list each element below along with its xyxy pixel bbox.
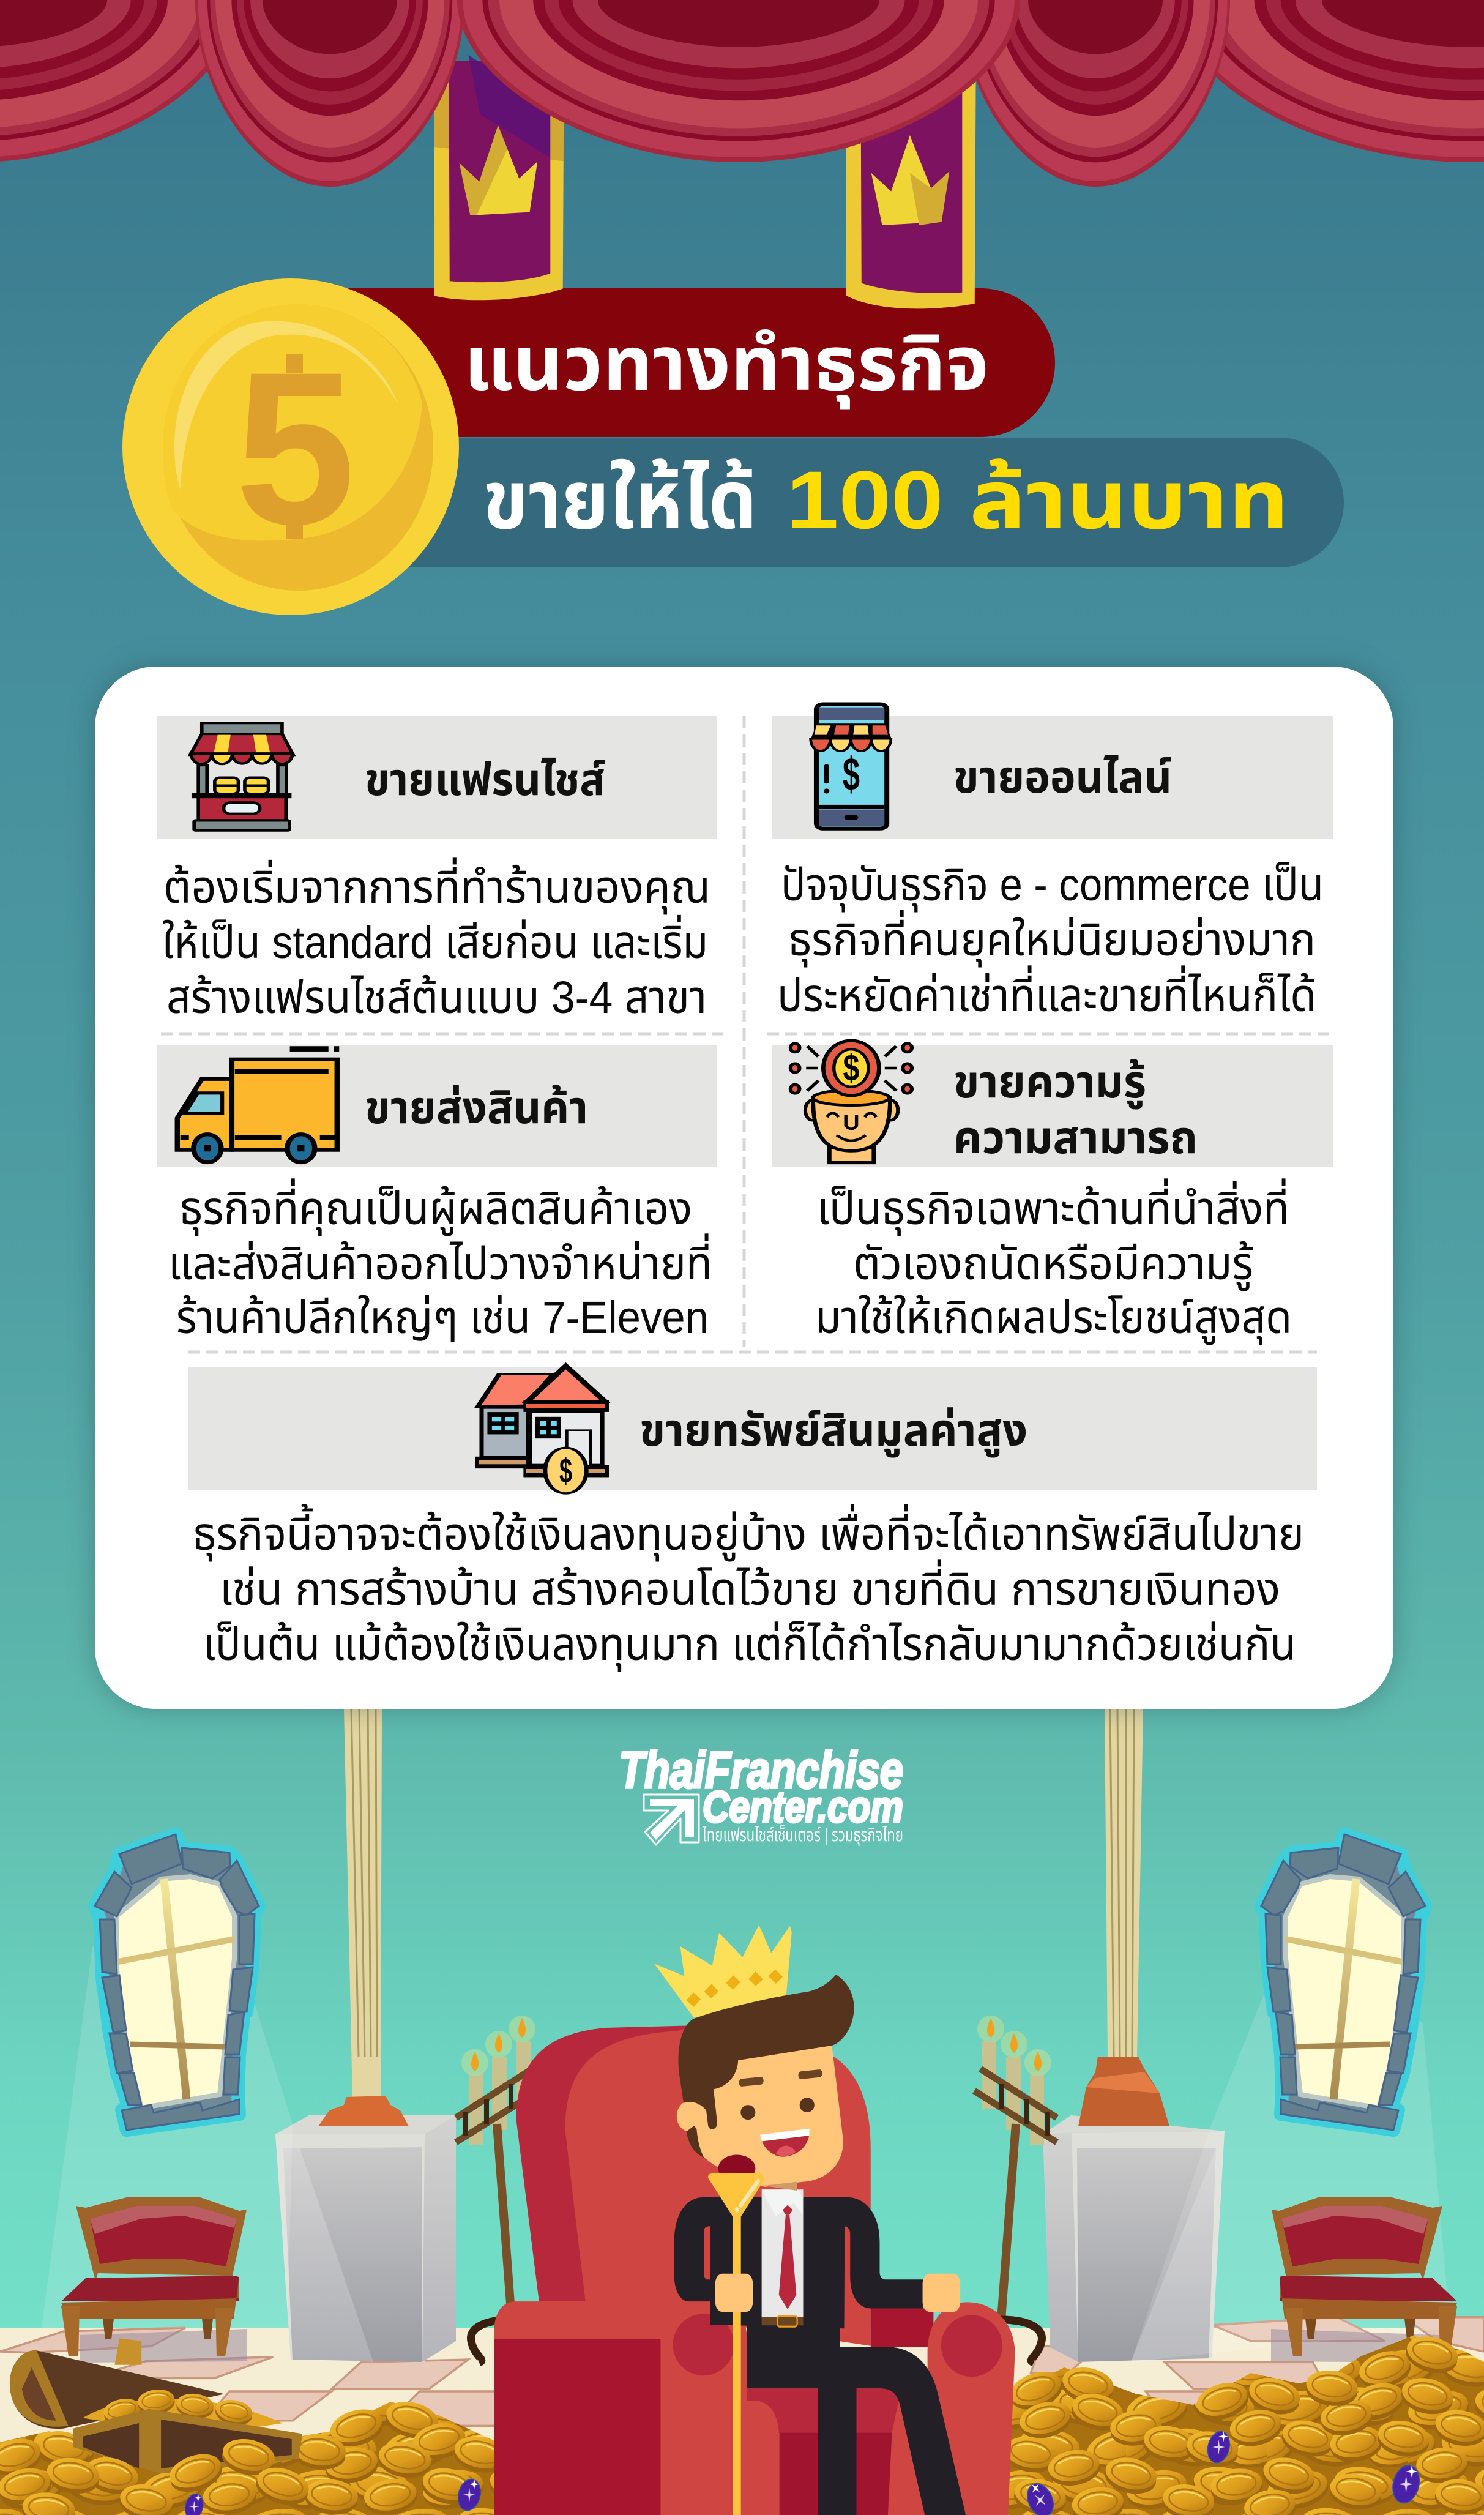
description: ตัวเองถนัดหรือมีความรู้ [853, 1238, 1253, 1291]
description: มาใช้ให้เกิดผลประโยชน์สูงสุด [815, 1292, 1292, 1345]
heading [953, 1056, 1198, 1163]
heading: ขายแฟรนไชส์ [365, 754, 605, 805]
red title pill [275, 288, 1055, 437]
gem: left pile one [455, 2476, 484, 2514]
curtain: left scallop [195, 0, 464, 187]
description: ธุรกิจที่คุณเป็นผู้ผลิตสินค้าเอง [179, 1178, 692, 1236]
header bar [157, 716, 717, 839]
coin with five: 5 [235, 327, 356, 570]
microphone [708, 2154, 764, 2515]
floor [0, 2317, 1484, 2515]
logo: domain: Center.com [703, 1783, 903, 1832]
description: เป็นธุรกิจเฉพาะด้านที่นำสิ่งที่ [817, 1178, 1289, 1236]
crown [654, 1925, 792, 2018]
section: wholesale [157, 1045, 717, 1343]
icon: houses with coin [475, 1366, 609, 1493]
chest box [73, 2409, 302, 2473]
description: สร้างแฟรนไชส์ต้นแบบ 3-4 สาขา [166, 972, 707, 1023]
heading: ความสามารถ [953, 1112, 1198, 1163]
trousers [747, 2325, 966, 2515]
left pedestal [275, 2115, 456, 2362]
header bar [772, 716, 1333, 839]
description: ให้เป็น standard เสียก่อน และเริ่ม [162, 914, 708, 968]
gem: right pile three [1016, 2473, 1065, 2515]
king figure [654, 1925, 966, 2515]
coin with five [122, 278, 459, 615]
logo: brand name: ThaiFranchise [619, 1741, 903, 1799]
icon: delivery truck [177, 1046, 339, 1162]
right bench [1271, 2197, 1457, 2363]
header bar [772, 1045, 1333, 1167]
description [162, 857, 710, 1023]
gem: right pile two [1389, 2462, 1423, 2506]
curtain: left swag [0, 0, 239, 162]
section: online [772, 704, 1333, 1021]
blue title pill [275, 438, 1344, 567]
dashed dividers [161, 716, 1329, 1352]
description [193, 1504, 1304, 1672]
description [815, 1178, 1292, 1345]
left candle stand [456, 2016, 539, 2363]
armchair and king [494, 1925, 1015, 2515]
heading: ขายออนไลน์ [953, 752, 1172, 802]
gem: left pile two [182, 2492, 206, 2515]
heading: ขายส่งสินค้า [365, 1082, 588, 1133]
shirt and tie [762, 2189, 803, 2326]
right window with light [1131, 1834, 1450, 2362]
icon: market stall [190, 723, 293, 831]
title line 1: แนวทางทำธุรกิจ [464, 322, 989, 410]
title line 2 yellow: 100 ล้านบาท [786, 455, 1289, 546]
curtain: right scallop [961, 0, 1230, 187]
description: ประหยัดค่าเช่าที่และขายที่ไหนก็ได้ [777, 965, 1316, 1021]
heading: ขายทรัพย์สินมูลค่าสูง [639, 1405, 1027, 1458]
description: ต้องเริ่มจากการที่ทำร้านของคุณ [163, 857, 710, 914]
foreground coins left [0, 2435, 484, 2515]
right coin pile [1003, 2331, 1484, 2515]
description: ธุรกิจที่คนยุคใหม่นิยมอย่างมาก [788, 910, 1316, 967]
gem: right pile one [1204, 2428, 1233, 2466]
icon: head with coin [791, 1041, 912, 1163]
left column [318, 1709, 409, 2126]
icon: houses with coin: $ [559, 1451, 572, 1490]
left bench [61, 2197, 247, 2363]
chest lid [10, 2350, 225, 2429]
banner: left crown [434, 55, 564, 300]
suit [674, 2197, 923, 2328]
chest lock [114, 2338, 141, 2365]
header bar [188, 1367, 1317, 1490]
illustrated room scene [0, 1709, 1484, 2515]
section: high value assets [188, 1366, 1317, 1672]
logo: tagline: ไทยแฟรนไชส์เซ็นเตอร์ | รวมธุรกิจไทย [702, 1825, 903, 1846]
white content card [95, 667, 1393, 1709]
description: เช่น การสร้างบ้าน สร้างคอนโดไว้ขาย ขายที่ดิน การขายเงินทอง [220, 1559, 1280, 1615]
right pedestal [1043, 2115, 1225, 2362]
chest coins [83, 2388, 283, 2437]
description: และส่งสินค้าออกไปวางจำหน่ายที่ [168, 1233, 712, 1289]
section: knowledge [772, 1041, 1333, 1345]
armchair [494, 2025, 1015, 2515]
hand holding microphone [715, 2274, 753, 2312]
title line 2 white: ขายให้ได้ [483, 455, 757, 546]
description [777, 859, 1324, 1021]
description: ธุรกิจนี้อาจจะต้องใช้เงินลงทุนอยู่บ้าง เพื่อที่จะได้เอาทรัพย์สินไปขาย [193, 1504, 1304, 1561]
heading: ขายความรู้ [953, 1056, 1146, 1110]
logo: arrow icon [644, 1795, 699, 1845]
description: เป็นต้น แม้ต้องใช้เงินลงทุนมาก แต่ก็ได้กำไรกลับมามากด้วยเช่นกัน [203, 1619, 1296, 1672]
right column [1078, 1709, 1169, 2126]
curtain: right swag [1175, 0, 1484, 162]
section: franchise [157, 716, 717, 1023]
head [678, 1975, 854, 2191]
curtains [0, 0, 1484, 187]
description [168, 1178, 712, 1343]
title group [122, 278, 1289, 615]
banner: right crown [846, 71, 976, 308]
logo [619, 1741, 903, 1846]
icon: phone shop: $ [843, 748, 860, 800]
description: ปัจจุบันธุรกิจ e - commerce เป็น [781, 859, 1324, 912]
icon: phone shop [811, 704, 892, 829]
ear [677, 2101, 703, 2132]
left coin pile [0, 2402, 494, 2515]
hand on armrest [923, 2274, 960, 2312]
left window with light [42, 1834, 293, 2328]
icon: head with coin: $ [843, 1047, 859, 1089]
curtain: centre swag [457, 0, 1020, 162]
description: ร้านค้าปลีกใหญ่ๆ เช่น 7-Eleven [176, 1292, 709, 1343]
treasure chest [10, 2338, 302, 2473]
right candle stand [974, 2016, 1057, 2363]
header bar [157, 1045, 717, 1167]
card surface [95, 667, 1393, 1709]
curtain banners with crowns [434, 55, 976, 308]
